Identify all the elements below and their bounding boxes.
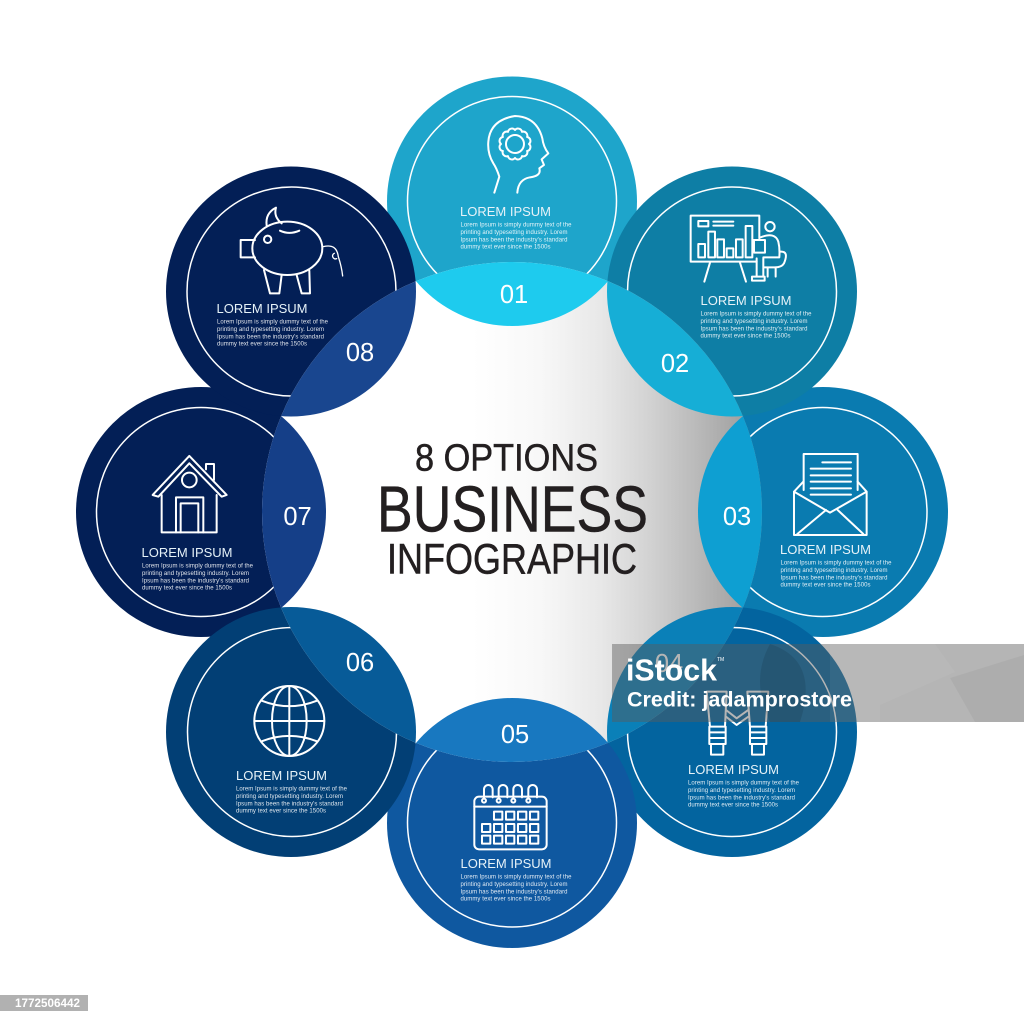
icon: connectors bbox=[707, 692, 768, 755]
text block: 03: Lorem Ipsum is simply dummy text of the bbox=[780, 561, 892, 567]
central circle bbox=[262, 262, 762, 762]
numbers on the segments: 02 bbox=[661, 350, 689, 378]
title bbox=[377, 438, 648, 584]
numbers on the segments: 04 bbox=[655, 650, 683, 678]
text block: 03 bbox=[780, 542, 892, 588]
text block: 08: Lorem Ipsum is simply dummy text of the bbox=[217, 320, 329, 326]
watermark banner: Credit: jadamprostore bbox=[627, 689, 852, 712]
text block: 02: dummy text ever since the 1500s bbox=[700, 334, 790, 340]
segment 04 lens bbox=[607, 607, 743, 743]
segment 07 lens bbox=[262, 416, 326, 608]
text block: 03: LOREM IPSUM bbox=[780, 542, 871, 557]
text block: 04: Lorem Ipsum is simply dummy text of the bbox=[688, 781, 800, 787]
panel 02: presentation bbox=[607, 166, 857, 416]
image id tag: 1772506442 bbox=[15, 998, 80, 1010]
text block: 05: Lorem Ipsum is simply dummy text of the bbox=[460, 875, 572, 881]
text block: 05: Ipsum has been the industry's standard bbox=[460, 889, 568, 895]
text block: 06: LOREM IPSUM bbox=[236, 768, 327, 783]
text block: 03: dummy text ever since the 1500s bbox=[780, 582, 870, 588]
text block: 08: LOREM IPSUM bbox=[216, 301, 308, 316]
numbers on the segments: 06 bbox=[346, 649, 374, 677]
text block: 05: dummy text ever since the 1500s bbox=[460, 896, 550, 902]
text block: 02 bbox=[700, 293, 812, 340]
panel 05: calendar bbox=[387, 698, 637, 948]
text block: 01: LOREM IPSUM bbox=[460, 204, 551, 219]
text block: 08: printing and typesetting industry. Lorem bbox=[217, 327, 324, 333]
segment 02 lens bbox=[607, 281, 743, 416]
text block: 02: Lorem Ipsum is simply dummy text of the bbox=[700, 312, 812, 318]
text block: 07 bbox=[142, 545, 254, 592]
watermark banner: TM bbox=[717, 657, 724, 663]
text block: 06 bbox=[236, 768, 348, 814]
text block: 05: printing and typesetting industry. Lorem bbox=[460, 882, 568, 888]
numbers on the segments: 07 bbox=[283, 503, 312, 531]
segment 03 lens bbox=[698, 416, 762, 608]
icon: head with gear bbox=[488, 116, 548, 193]
icon: globe bbox=[254, 686, 324, 756]
numbers on the segments: 05 bbox=[501, 721, 529, 749]
panel 08: savings bbox=[166, 166, 416, 416]
segment 08 lens bbox=[281, 282, 416, 416]
text block: 04: dummy text ever since the 1500s bbox=[688, 802, 778, 808]
watermark banner bbox=[612, 644, 1024, 722]
icon: calendar bbox=[474, 785, 547, 849]
text block: 01: Lorem Ipsum is simply dummy text of the bbox=[460, 223, 572, 229]
text block: 04: Ipsum has been the industry's standard bbox=[688, 795, 795, 801]
text block: 08: Ipsum has been the industry's standard bbox=[217, 334, 324, 340]
text block: 06: printing and typesetting industry. Lorem bbox=[236, 794, 343, 800]
icon: presenter at chart board bbox=[691, 216, 786, 282]
panel 01: strategy bbox=[387, 76, 637, 326]
text block: 07: LOREM IPSUM bbox=[142, 545, 233, 560]
text block: 01: dummy text ever since the 1500s bbox=[460, 244, 550, 250]
text block: 06: dummy text ever since the 1500s bbox=[236, 808, 326, 814]
segment 06 lens bbox=[281, 607, 416, 742]
segment 05 lens bbox=[416, 698, 608, 762]
text block: 04 bbox=[688, 762, 800, 808]
title: INFOGRAPHIC bbox=[387, 536, 637, 584]
text block: 03: printing and typesetting industry. Lorem bbox=[780, 568, 888, 574]
text block: 07: printing and typesetting industry. Lorem bbox=[142, 571, 249, 577]
numbers on the segments: 03 bbox=[723, 503, 751, 531]
text block: 07: Ipsum has been the industry's standard bbox=[142, 578, 249, 584]
image id tag bbox=[0, 995, 88, 1011]
segment 01 lens bbox=[416, 262, 608, 326]
text block: 07: dummy text ever since the 1500s bbox=[142, 586, 232, 592]
icon: piggy bank bbox=[241, 208, 343, 293]
text block: 04: LOREM IPSUM bbox=[688, 762, 779, 777]
text block: 06: Lorem Ipsum is simply dummy text of the bbox=[236, 787, 348, 793]
text block: 07: Lorem Ipsum is simply dummy text of the bbox=[142, 564, 254, 570]
text block: 03: Ipsum has been the industry's standard bbox=[780, 575, 888, 581]
panel 03: mail bbox=[698, 387, 948, 637]
numbers on the segments bbox=[283, 281, 751, 749]
text block: 01 bbox=[460, 204, 572, 250]
text block: 04: printing and typesetting industry. Lorem bbox=[688, 788, 795, 794]
text block: 08 bbox=[216, 301, 329, 348]
panel 06: globe bbox=[166, 607, 416, 857]
text block: 06: Ipsum has been the industry's standard bbox=[236, 801, 343, 807]
numbers on the segments: 01 bbox=[500, 281, 528, 309]
title: 8 OPTIONS bbox=[415, 438, 598, 480]
panel 07: home bbox=[76, 387, 326, 637]
panel 04: connectors bbox=[607, 607, 857, 857]
numbers on the segments: 08 bbox=[346, 339, 374, 367]
icon: envelope with letter bbox=[794, 454, 867, 535]
watermark banner: iStock bbox=[626, 653, 718, 688]
text block: 02: Ipsum has been the industry's standard bbox=[700, 326, 808, 332]
text block: 05 bbox=[460, 856, 572, 902]
title: BUSINESS bbox=[377, 473, 648, 546]
text block: 01: Ipsum has been the industry's standard bbox=[460, 237, 568, 243]
text block: 02: printing and typesetting industry. Lorem bbox=[700, 319, 808, 325]
text block: 01: printing and typesetting industry. Lorem bbox=[460, 230, 568, 236]
text block: 05: LOREM IPSUM bbox=[460, 856, 552, 871]
text block: 08: dummy text ever since the 1500s bbox=[217, 342, 307, 348]
text block: 02: LOREM IPSUM bbox=[700, 293, 792, 308]
icon: house bbox=[153, 456, 227, 532]
